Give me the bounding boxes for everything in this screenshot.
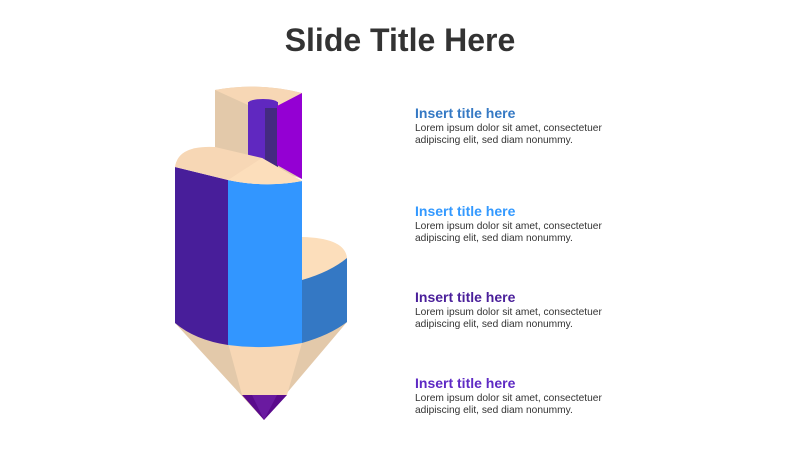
text block 2: [415, 203, 602, 244]
text block 2: Insert title here: [415, 203, 515, 219]
back block: [215, 87, 302, 179]
text block 3: Lorem ipsum dolor sit amet, consectetuer adipiscing elit, sed diam nonummy.: [415, 307, 602, 330]
text block 3: [415, 289, 602, 330]
text block 4: [415, 375, 602, 416]
title: Slide Title Here: [285, 22, 515, 58]
text block 1: Lorem ipsum dolor sit amet, consectetuer adipiscing elit, sed diam nonummy.: [415, 123, 602, 146]
text block 2: Lorem ipsum dolor sit amet, consectetuer adipiscing elit, sed diam nonummy.: [415, 221, 602, 244]
right cylinder: [302, 237, 347, 343]
text block 1: Insert title here: [415, 105, 515, 121]
big cylinder: [175, 147, 302, 347]
text block 3: Insert title here: [415, 289, 515, 305]
text block 4: Lorem ipsum dolor sit amet, consectetuer adipiscing elit, sed diam nonummy.: [415, 393, 602, 416]
text block 1: [415, 105, 602, 146]
text block 4: Insert title here: [415, 375, 515, 391]
cone: [175, 322, 347, 420]
